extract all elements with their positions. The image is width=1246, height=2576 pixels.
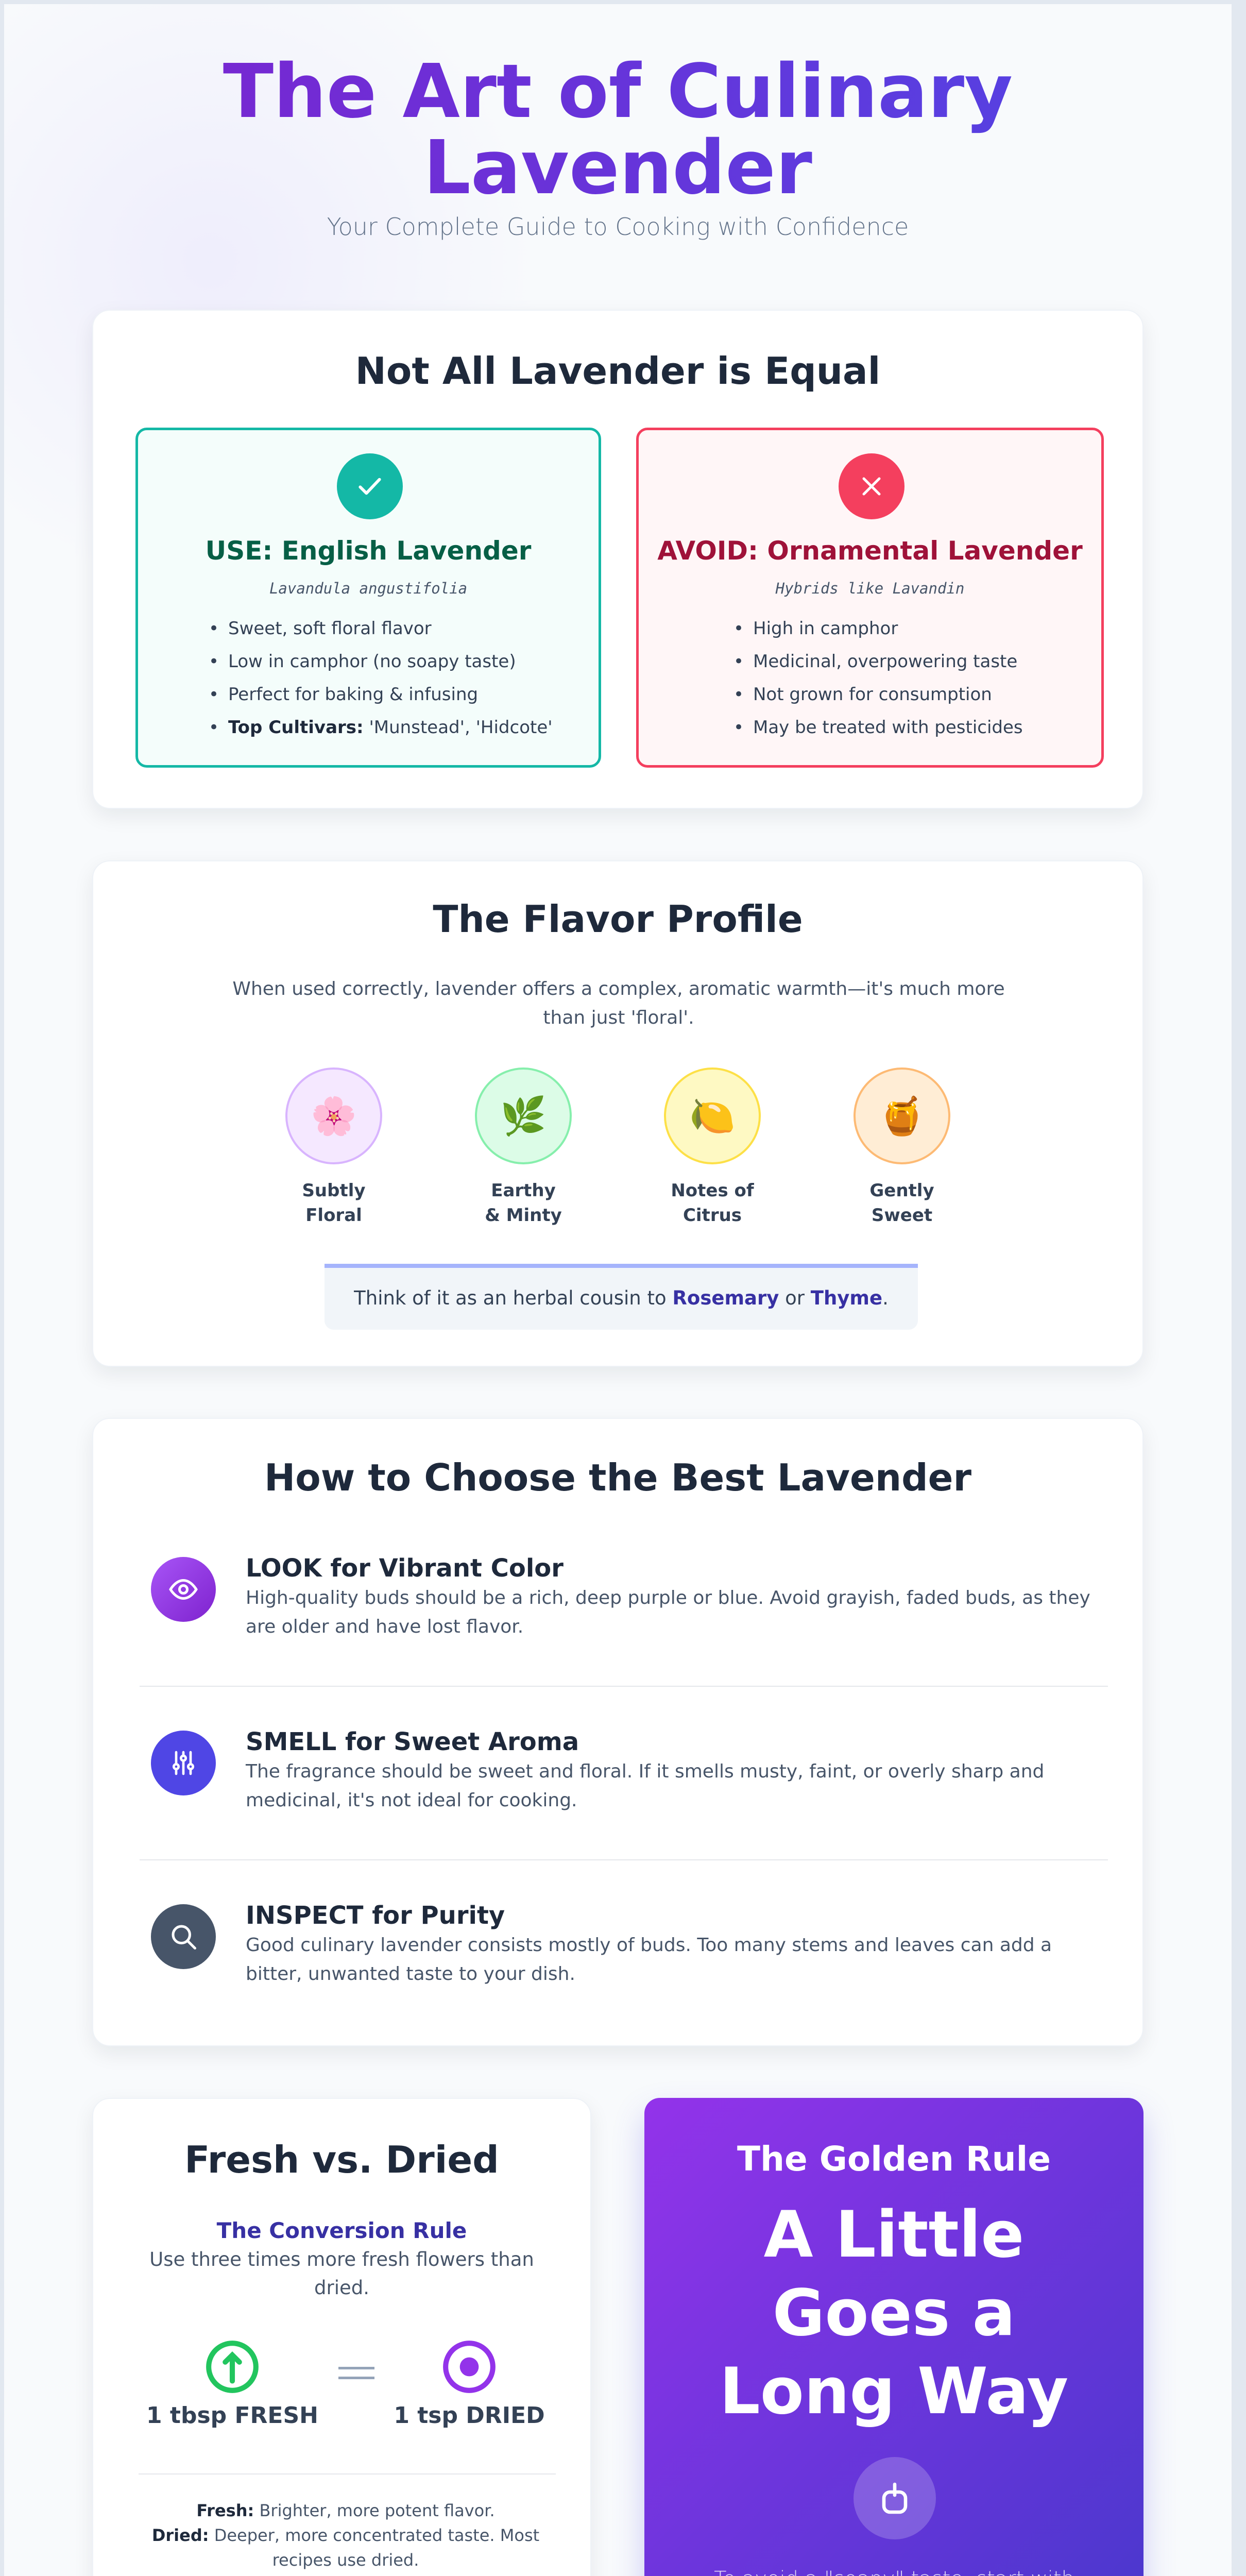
panel: not all lavender is equal: [92, 310, 1143, 809]
item: smell: SMELL for Sweet Aroma: [246, 1727, 579, 1756]
latin name: Hybrids like Lavandin: [776, 580, 964, 597]
bullet list: Sweet, soft floral flavor: [228, 618, 432, 639]
icon: check: [337, 453, 403, 519]
heading: How to Choose the Best Lavender: [264, 1456, 971, 1499]
box: use english lavender: •: [209, 717, 219, 738]
panel: how to choose: [92, 1418, 1143, 2046]
flavor: gently sweet: [854, 1067, 950, 1226]
flavor: citrus: 🍋: [689, 1094, 736, 1138]
flavor: gently sweet: Sweet: [872, 1205, 932, 1226]
bullet list: [209, 618, 553, 738]
bullet list: High in camphor: [753, 618, 898, 639]
big statement: [720, 2198, 1068, 2429]
item: look: High-quality buds should be a rich, deep purple or blue. Avoid grayish, faded buds, as they are older and have lost flavor.: [246, 1587, 1090, 1637]
bullet list: Top Cultivars: 'Munstead', 'Hidcote': [228, 717, 553, 738]
heading: The Golden Rule: [737, 2139, 1051, 2179]
callout: herbal cousin: Think of it as an herbal cousin to Rosemary or Thyme.: [354, 1287, 889, 1309]
item: smell: The fragrance should be sweet and floral. If it smells musty, faint, or overly sharp and medicinal, it's not ideal for cooking.: [246, 1761, 1044, 1811]
item: inspect: Good culinary lavender consists mostly of buds. Too many stems and leaves can add a bitter, unwanted taste to your dish.: [246, 1935, 1052, 1985]
flavor: earthy minty: & Minty: [485, 1205, 562, 1226]
latin name: Lavandula angustifolia: [269, 580, 467, 597]
flavor: subtly floral: Floral: [305, 1205, 362, 1226]
heading: Not All Lavender is Equal: [355, 349, 880, 393]
flavor: subtly floral: [285, 1067, 382, 1226]
notes: Fresh: Brighter, more potent flavor.: [196, 2501, 495, 2520]
icon: fresh: [146, 2341, 318, 2429]
bullet list: Low in camphor (no soapy taste): [228, 651, 516, 672]
panel: fresh vs dried: [92, 2098, 591, 2576]
box: avoid ornamental: •: [733, 684, 744, 705]
icon: sliders: [151, 1731, 216, 1795]
big statement: A Little: [764, 2198, 1024, 2272]
title: Lavender: [423, 124, 812, 211]
bullet list: [733, 618, 1023, 738]
subheading: AVOID: Ornamental Lavender: [657, 536, 1083, 566]
subheading: USE: English Lavender: [206, 536, 531, 566]
callout: herbal cousin: [325, 1264, 918, 1330]
conversion rule: The Conversion Rule: [217, 2218, 467, 2243]
item: look: [151, 1554, 1090, 1637]
item: smell: [151, 1727, 1044, 1811]
bullet list: Not grown for consumption: [753, 684, 992, 705]
subtitle: Your Complete Guide to Cooking with Confidence: [327, 213, 909, 241]
heading: Fresh vs. Dried: [184, 2138, 499, 2181]
box: avoid ornamental: •: [733, 651, 744, 672]
icon: spoon/timer: [854, 2457, 936, 2539]
flavor: gently sweet: 🍯: [879, 1094, 925, 1138]
flavor: subtly floral: Subtly: [302, 1180, 366, 1201]
flavor: citrus: [664, 1067, 761, 1226]
bullet list: Perfect for baking & infusing: [228, 684, 478, 705]
notes: Dried: Deeper, more concentrated taste. Most recipes use dried.: [152, 2526, 539, 2570]
flavor: earthy minty: 🌿: [500, 1094, 547, 1138]
icon: x: [839, 453, 904, 519]
icon: dried: 1 tsp DRIED: [394, 2402, 545, 2429]
box: use english lavender: [135, 428, 601, 768]
bullet list: May be treated with pesticides: [753, 717, 1023, 738]
flavor: earthy minty: Earthy: [491, 1180, 556, 1201]
flavor: subtly floral: 🌸: [311, 1094, 357, 1138]
box: use english lavender: •: [209, 684, 219, 705]
conversion rule: Use three times more fresh flowers than dried.: [149, 2248, 534, 2299]
panel: golden rule: [644, 2098, 1143, 2576]
big statement: Long Way: [720, 2354, 1068, 2429]
flavor: earthy minty: [475, 1067, 572, 1226]
conversion rule: [149, 2218, 534, 2299]
icon: fresh: 1 tbsp FRESH: [146, 2402, 318, 2429]
big statement: Goes a: [773, 2276, 1015, 2350]
title: [4, 53, 1232, 206]
box: use english lavender: •: [209, 618, 219, 639]
panel: flavor profile: [92, 860, 1143, 1367]
flavor: citrus: Citrus: [683, 1205, 742, 1226]
box: use english lavender: •: [209, 651, 219, 672]
item: inspect: [151, 1901, 1052, 1985]
icon: dried: [394, 2341, 545, 2429]
icon: eye: [151, 1557, 216, 1622]
flavor: citrus: Notes of: [671, 1180, 754, 1201]
equals sign: [338, 2367, 374, 2379]
intro text: When used correctly, lavender offers a complex, aromatic warmth—it's much more than just 'floral'.: [232, 978, 1005, 1028]
box: avoid ornamental: •: [733, 618, 744, 639]
icon: magnifier: [151, 1904, 216, 1969]
box: avoid ornamental: [636, 428, 1104, 768]
item: look: LOOK for Vibrant Color: [246, 1554, 564, 1583]
bullet list: Medicinal, overpowering taste: [753, 651, 1017, 672]
title: The Art of Culinary: [223, 48, 1013, 134]
heading: The Flavor Profile: [433, 897, 803, 941]
flavor: gently sweet: Gently: [869, 1180, 934, 1201]
notes: [152, 2501, 539, 2570]
box: avoid ornamental: •: [733, 717, 744, 738]
item: inspect: INSPECT for Purity: [246, 1901, 505, 1930]
